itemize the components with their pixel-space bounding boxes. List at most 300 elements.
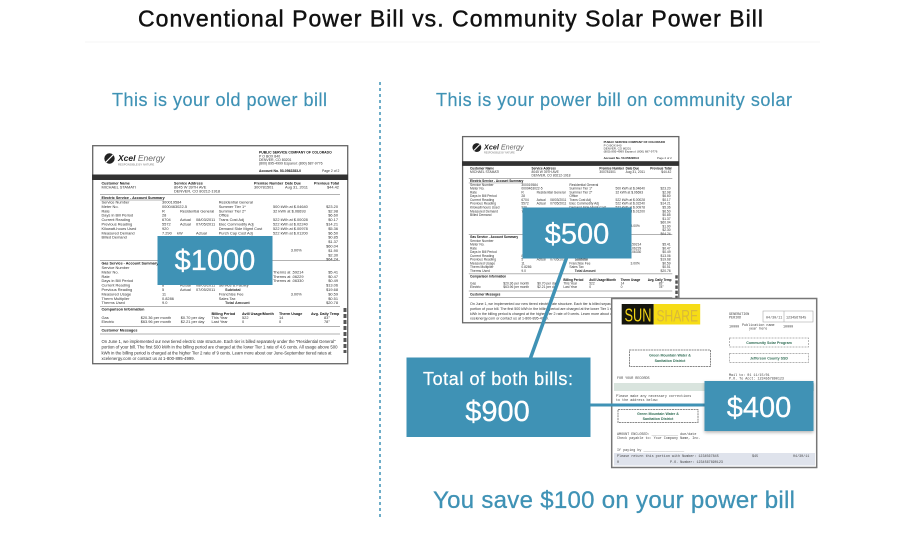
bill document: utility: $19.68	[661, 258, 671, 262]
bill document: Franchise Fee	[219, 291, 244, 296]
label: Green Mountain Water: Green Mountain Water &	[649, 354, 691, 358]
text: invoice header: 10000	[729, 326, 739, 330]
bill document: PUBLIC SERVICE COMPANY OF COLORADO	[259, 150, 332, 154]
bill document: utility: Rate	[470, 246, 477, 250]
bill document: utility: 6704	[521, 198, 529, 202]
bill document: Current Reading	[102, 217, 130, 222]
bill document: utility: 08/03/2011	[550, 198, 567, 202]
text: invoice header: PERIOD	[729, 316, 741, 320]
text: invoice header: GENERATION	[729, 313, 749, 317]
bill document: 08/03/2011	[196, 217, 215, 222]
label: Green Mountain Water remittance: Green Mountain Water &	[637, 412, 679, 416]
icon: Xcel logo	[104, 153, 166, 166]
bill document: Billed Demand	[102, 235, 127, 240]
bill document: Actual	[180, 222, 191, 226]
bill document: Rate	[102, 274, 110, 279]
bill document: utility: Premise Number	[599, 167, 625, 171]
bill document: R	[162, 208, 165, 213]
bill document: 300019584	[162, 200, 182, 204]
bill document: utility: Purch Cap Cost Adj	[569, 209, 598, 213]
bill document: utility: Rate	[470, 190, 477, 194]
bill document: $5.36	[328, 226, 338, 231]
bill document: Actual	[180, 217, 191, 222]
bill document: utility: 920	[521, 205, 527, 210]
callout: $400: $400	[727, 392, 791, 424]
bill document: 3.00%	[291, 291, 302, 296]
bill document: utility: Service Number	[470, 239, 495, 243]
bill document: utility: 07/05/2011	[550, 202, 567, 206]
bill document: SunShare: If paying by ____________________	[617, 448, 685, 453]
bill document: SunShare: AMOUNT ENCLOSED: _____________ due/date	[617, 432, 696, 437]
bill document: utility: Gas Service - Account Summary	[470, 235, 518, 239]
bill document: utility: Service Number	[470, 183, 495, 187]
bill document: $63.96 per month	[141, 319, 171, 324]
bill document: utility: Therms at .59214	[615, 243, 641, 247]
bill document: 8	[162, 283, 164, 288]
bill document: utility: $2.98	[662, 190, 671, 194]
bill document: utility: 78°	[659, 285, 664, 289]
icon: SunShare logo: SHARE	[656, 306, 698, 326]
bill document: Therms Used	[102, 300, 125, 305]
bill document: utility: Measured Demand	[470, 209, 498, 213]
bill document: $0.85	[328, 235, 338, 240]
label: Jefferson County SD	[730, 354, 808, 362]
bill document: utility	[462, 137, 679, 323]
bill document: Summer Tier 2*	[219, 208, 246, 213]
bill document: utility: $13.06	[661, 254, 671, 258]
text: invoice header: year here	[749, 326, 767, 332]
bill document: Therms at .06229	[273, 274, 304, 279]
bill document: Customer Messages	[102, 328, 137, 332]
bill document: utility: $20.78	[661, 269, 671, 273]
bill document: utility: DENVER, CO 80201	[604, 147, 631, 151]
bill document: utility: Actual	[550, 209, 560, 213]
bill document: 920	[162, 226, 169, 231]
bill document: 522	[242, 315, 248, 320]
bill document: utility: Elec Commodity Adj	[569, 202, 599, 206]
bill document: 0000463022-5	[162, 204, 187, 209]
bill document: utility: $1.37	[662, 217, 671, 221]
bill document: Page 2 of 2	[322, 169, 339, 173]
bill document: Comparison Information	[102, 308, 145, 312]
bill document: $19.68	[326, 287, 338, 292]
bill document: 07/05/2011	[196, 287, 215, 292]
bill document: 9.0	[162, 300, 168, 305]
bill document: Demand Side Mgmt Cost	[219, 226, 263, 231]
bill document: utility: Date Due	[626, 167, 639, 171]
bill document: utility: Actual	[537, 254, 546, 258]
bill document: Service Number	[102, 200, 130, 204]
bill document: utility: 9.0	[521, 269, 526, 273]
bill document: kWh in the billing period is charged at the higher Tier 2 rate of 9 cents. Learn more about our June-September tiered rates at	[102, 350, 332, 356]
bill document: Trans Cost Adj	[219, 217, 244, 222]
icon: Xcel logo	[472, 143, 524, 155]
bill document: 0.8286	[162, 296, 174, 301]
bill document: Electric Service - Account Summary	[102, 196, 166, 200]
bill document: Therms at .06330	[273, 278, 304, 283]
bill document: utility: Office	[569, 194, 578, 198]
bill document: utility: Current Reading	[470, 198, 494, 202]
bill document: utility: $2.30	[662, 228, 671, 232]
bill document: 78°	[324, 319, 330, 324]
bill document: SunShare: $45	[752, 454, 758, 459]
bill document: utility: 0	[621, 285, 623, 289]
bill document: Previous Reading	[102, 287, 132, 292]
bill document: Total Amount	[225, 300, 250, 305]
bill document: utility: 0.8286	[521, 265, 532, 269]
bill document: $13.06	[326, 283, 338, 288]
bill document: utility: $6.50	[662, 209, 671, 213]
bill document: utility: Meter No.	[470, 187, 485, 191]
bill document: utility: portion of your bill. The first 500 kWh in the billing period are charged at the lower Tier 1 rate of 4.6 cents. All usage above 500	[470, 307, 670, 311]
bill document: DENVER, CO 80201	[259, 158, 292, 162]
bill document: utility: Measured Usage	[470, 261, 495, 265]
bill document: SunShare: FOR YOUR RECORDS	[617, 377, 650, 381]
bill document: utility: Summer Tier 1*	[569, 187, 593, 191]
bill document: utility: 83°	[659, 282, 664, 286]
bill document: Service & Facility	[219, 283, 249, 288]
bill document: utility: Demand Side Mgmt Cost	[569, 205, 606, 210]
bill document: utility: Electric	[470, 285, 481, 289]
bill document: $20.78	[326, 300, 338, 305]
bill document: utility: Customer Name	[470, 167, 494, 171]
bill document: SunShare: P.O. To Acct: 1234567890123	[729, 378, 784, 382]
bill document: utility: 3.00%	[630, 224, 640, 228]
bill document: utility: Therms at .06229	[615, 246, 641, 250]
callout: $500	[522, 208, 632, 258]
bill document: utility: Trans Cost Adj	[569, 198, 591, 202]
callout: $1000	[158, 236, 272, 285]
bill document: Last Year	[212, 319, 228, 324]
bill document: utility: Billing Period	[563, 278, 583, 282]
callout: total of both bills: Total of both bills:	[423, 369, 573, 389]
bill document: 300781501	[254, 184, 273, 190]
heading: old power bill: This is your old power bill	[112, 90, 327, 110]
text: invoice header: 04/30/11	[766, 316, 782, 320]
bill document: SunShare: P.O. Number: 1234567890123	[670, 460, 723, 465]
bill document: Subtotal	[225, 287, 241, 292]
bill document: xcelenergy.com or contact us at 1-800-895-4999.	[102, 356, 195, 361]
text: invoice header: 1234567845	[786, 316, 806, 320]
bill document: SunShare: Please make any necessary corrections	[616, 394, 691, 399]
bill document: SunShare: to the address below:	[616, 398, 659, 403]
bill document: P O BOX 840	[259, 154, 280, 158]
bill document: 14	[279, 315, 284, 320]
bill document: utility: Days in Bill Period	[470, 250, 497, 254]
bill document: SunShare	[612, 298, 817, 468]
bill document: 6704	[162, 217, 171, 222]
bill document: Residential General	[219, 200, 253, 204]
bill document: Espanol: (800) 687-9776	[284, 162, 323, 166]
bill document: utility: 5	[521, 258, 523, 262]
label: Green Mountain Water remittance: Sanitation District	[643, 417, 674, 421]
bill document: $0.47	[328, 274, 338, 279]
bill document: $2.30	[328, 252, 339, 257]
bill document: utility: DENVER, CO 80212-1918	[532, 174, 571, 178]
bill document: Purch Cap Cost Adj	[219, 230, 253, 235]
bill document: 500 kWh at $.04640	[273, 204, 309, 209]
bill document: Therm Multiplier	[102, 296, 130, 301]
bill document: utility: R	[521, 190, 524, 194]
panel: conventional bill	[92, 146, 348, 364]
bill document: utility: (800) 895-4999	[604, 150, 624, 154]
bill document: Days in Bill Period	[102, 278, 133, 283]
bill document: utility: 0000463022-5	[521, 187, 543, 191]
bill document: utility: 8045 W 39TH AVE	[532, 170, 560, 174]
bill document: Electric	[102, 319, 114, 324]
bill document: utility: P O BOX 840	[604, 144, 622, 148]
bill document: utility: This Year	[563, 282, 578, 286]
bill document: kW	[177, 230, 183, 235]
panel: community solar bills	[406, 137, 817, 468]
bill document: $1.37	[328, 239, 338, 244]
bill document: utility: Meter No.	[470, 243, 485, 247]
callout: $400	[704, 381, 814, 431]
bill document: Premise Number	[254, 182, 284, 186]
conclusion: savings: You save $100 on your power bill	[433, 487, 795, 514]
bill document: utility: 522	[589, 282, 595, 286]
bill document: $1.90	[328, 248, 339, 253]
bill document: $0.70 per day	[181, 315, 205, 320]
callout: $500: $500	[545, 218, 609, 250]
bill document: utility: xcelenergy.com or contact us at 1-800-895-4999.	[470, 317, 549, 321]
bill document: Billing Period	[212, 312, 236, 316]
bill document: utility: $63.96 per month	[503, 285, 529, 289]
icon: Xcel logo: Xcel Energy	[117, 153, 166, 163]
bill document: utility: Account No. 53-0562283-0	[604, 156, 640, 160]
bill document: 28	[162, 213, 166, 218]
bill document: SunShare: 0	[617, 461, 619, 465]
bill document: 08/03/2011	[196, 283, 215, 288]
bill document: $2.98	[328, 208, 338, 213]
bill document: utility: Page 2 of 2	[657, 156, 672, 160]
bill document: utility: Service & Facility	[569, 254, 595, 258]
callout: $1000: $1000	[175, 245, 255, 277]
bill document: utility: $0.17	[662, 198, 671, 202]
bill document: Gas	[102, 315, 109, 320]
bill document: Service Address	[174, 182, 203, 186]
bill document: utility: 300019584	[521, 183, 538, 187]
bill document: $6.50	[328, 230, 339, 235]
bill document: $6.60	[328, 213, 339, 218]
bill document: utility: 500 kWh at $.04640	[615, 187, 645, 191]
icon: SunShare logo: SUN	[624, 306, 652, 326]
bill document: utility: On June 1, we implemented our new tiered electric rate structure. Each tier is billed separately under the "Residential General"	[470, 302, 669, 306]
bill document: utility: 300781501	[599, 170, 616, 174]
bill document: $44.42	[327, 184, 339, 190]
bill document: 07/05/2011	[196, 222, 215, 226]
bill document: utility: Previous Reading	[470, 258, 496, 262]
callout: total of both bills: $900	[465, 396, 530, 428]
bill document: utility: 28	[521, 194, 525, 198]
bill document: Kilowatt-hours Used	[102, 226, 136, 231]
bill document: utility: 522 kWh at $.00028	[615, 198, 645, 202]
bill document: utility: Aug 31, 2011	[626, 170, 645, 174]
bill document: utility: Franchise Fee	[569, 261, 591, 265]
bill document: Gas Service - Account Summary	[102, 262, 159, 266]
icon: SunShare logo	[622, 304, 700, 326]
bill document: Aug 31, 2011	[285, 184, 308, 190]
bill document: utility: $0.70 per day	[537, 282, 558, 286]
bill document: utility: Total Amount	[575, 269, 596, 273]
bill document: utility: 522 kWh at $.02240	[615, 202, 645, 206]
bill document: $0.59	[328, 291, 338, 296]
bill document: 522 kWh at $.01200	[273, 230, 309, 235]
bill document: utility: Comparison Information	[470, 274, 506, 278]
bill document: utility: $2.21 per day	[537, 285, 558, 289]
bill document: utility: 0	[589, 285, 591, 289]
bill document: SunShare: 04/30/11	[793, 454, 809, 459]
bill document: utility: $0.85	[662, 213, 671, 217]
bill document: utility: Days in Bill Period	[470, 194, 497, 198]
bill document: utility: $1.90	[662, 224, 671, 228]
bill document: Avill Usage/Month	[242, 312, 275, 316]
icon: Xcel logo: RESPONSIBLE BY NATURE	[484, 151, 515, 155]
bill document: utility: 3.00%	[630, 261, 640, 265]
bill document: utility: PUBLIC SERVICE COMPANY OF COLORADO	[604, 140, 666, 144]
bill document: utility: MICHAEL STAMATI	[470, 170, 499, 174]
bill document: Elec Commodity Adj	[219, 222, 254, 226]
heading: community solar bill: This is your power bill on community solar	[436, 90, 792, 110]
bill document: Previous Total	[314, 182, 339, 186]
label: Green Mountain Water remittance	[618, 410, 698, 422]
bill document: Actual	[180, 283, 191, 288]
bill document: Measured Usage	[102, 291, 131, 296]
label: Jefferson County SD: Jefferson County SSD	[750, 356, 788, 360]
bill document: utility: kWh in the billing period is charged at the higher Tier 2 rate of 9 cents. Learn more about our June-September tiered rates at	[470, 312, 665, 316]
bill document: $5.41	[328, 269, 338, 274]
bill document: utility: $6.60	[662, 194, 671, 198]
bill document: Account No. 53-0562283-0	[259, 169, 301, 173]
bill document: utility: Last Year	[563, 285, 578, 289]
bill document: $60.04	[326, 244, 339, 248]
text: invoice header: Publication name	[742, 323, 775, 328]
bill document: utility: $14.21	[661, 202, 671, 206]
bill document: utility: Actual	[537, 198, 546, 202]
bill document: 522 kWh at $.00978	[273, 226, 308, 231]
bill document: $23.20	[326, 204, 339, 209]
bill document: 3.00%	[291, 248, 302, 252]
bill document: 11	[162, 291, 166, 296]
bill document: This Year	[212, 315, 228, 320]
bill document: utility: Billed Demand	[470, 213, 492, 217]
bill document: Days in Bill Period	[102, 213, 133, 218]
bill document: Avg. Daily Temp	[311, 312, 340, 316]
bill document: SunShare: Mail to: 01 11/15/01	[729, 373, 770, 378]
bill document: utility: kW	[534, 209, 540, 213]
bill document: portion of your bill. The first 500 kWh in the billing period are charged at the lower Tier 1 rate of 4.6 cents. All usage above 500	[102, 344, 338, 350]
bill document: utility: $5.36	[662, 205, 671, 210]
bill document: Date Due	[285, 182, 301, 186]
bill document: 5	[162, 287, 164, 292]
bill document	[92, 146, 348, 364]
bill document: utility: Electric Service - Account Summary	[470, 179, 524, 183]
bill document: Previous Reading	[102, 222, 132, 226]
bill document: Meter No.	[102, 204, 119, 209]
bill document: utility: 522 kWh at $.00978	[615, 205, 645, 210]
bill document: utility: $44.42	[661, 170, 671, 174]
bill document: 0	[279, 319, 282, 324]
bill document: utility: Avg. Daily Temp	[648, 278, 672, 282]
connector: $400 to total	[590, 404, 705, 406]
callout: total of both bills	[406, 358, 590, 437]
bill document: utility: Customer Messages	[470, 292, 501, 296]
bill document: $20.36 per month	[141, 315, 171, 320]
bill document: $0.49	[328, 278, 338, 283]
bill document: utility: 5572	[521, 202, 529, 206]
bill document: utility: 522 kWh at $.01200	[615, 209, 645, 213]
bill document: utility: Previous Reading	[470, 202, 496, 206]
divider: dotted centre line	[379, 82, 381, 520]
bill document: Customer Name	[102, 182, 130, 186]
bill document: utility: Current Reading	[470, 254, 494, 258]
bill document: $0.51	[328, 296, 338, 301]
bill document: Rate	[102, 208, 110, 213]
bill document: (800) 895-4999	[259, 162, 283, 166]
label: Green Mountain Water	[630, 350, 710, 366]
bill document: utility: Gas	[470, 282, 476, 286]
bill document: utility: $64.24	[661, 232, 671, 236]
bill document: Residential General	[180, 208, 214, 213]
bill document: $64.24	[326, 257, 339, 262]
connector: $500 to total	[530, 258, 566, 358]
bill document: Therm Usage	[279, 312, 302, 316]
bill document: $0.17	[328, 217, 338, 222]
bill document: Meter No.	[102, 269, 119, 274]
bill document: utility: Service Address	[532, 167, 556, 171]
bill document: Actual	[180, 287, 191, 292]
text: invoice header	[729, 311, 813, 332]
bill document: Current Reading	[102, 283, 130, 288]
bill document: utility: Subtotal	[575, 258, 588, 262]
bill document: utility: $0.51	[662, 265, 671, 269]
bill document: utility: Therms Used	[470, 269, 490, 273]
bill document: 32 kWh at $.06693	[273, 208, 306, 213]
bill document: utility: Espanol: (800) 687-9776	[625, 150, 658, 154]
bill document: utility: $20.36 per month	[503, 282, 529, 286]
label: Green Mountain Water: Sanitation District	[655, 359, 686, 363]
bill document: utility: Actual	[537, 202, 546, 206]
icon: Xcel logo: RESPONSIBLE BY NATURE	[118, 162, 154, 166]
bill document: utility: Actual	[537, 258, 546, 262]
bill document: utility: Therms at .06330	[615, 250, 641, 254]
bill document: utility: 7.290	[521, 209, 530, 213]
bill document: 8045 W 39TH AVE	[174, 184, 207, 190]
bill document: Service Number	[102, 265, 130, 270]
bill document: utility: 11	[521, 261, 525, 265]
bill document: Sales Tax	[219, 296, 236, 301]
bill document: utility: $0.59	[662, 261, 671, 265]
bill document: 83°	[324, 315, 330, 320]
bill document: SunShare: Please return this portion with Number: 1234567845	[617, 454, 719, 459]
bill document: utility: $0.49	[662, 250, 671, 254]
bill document: 7.290	[162, 230, 173, 235]
label: Community Solar Program: Community Solar Program	[746, 341, 792, 345]
bill document: utility: Avill Usage/Month	[589, 278, 616, 282]
bill document: Summer Tier 1*	[219, 204, 246, 209]
bill document: On June 1, we implemented our new tiered electric rate structure. Each tier is billed separately under the "Residential General"	[102, 339, 336, 344]
bill document: utility: Residential General	[569, 183, 599, 187]
bill document: Therms at .59214	[273, 269, 304, 274]
bill document: utility: Previous Total	[650, 167, 672, 171]
bill document: utility: 8	[521, 254, 523, 258]
label: Community Solar Program	[730, 338, 808, 347]
bill document: MICHAEL STAMATI	[102, 184, 136, 190]
bill document: DENVER, CO 80212-1918	[174, 188, 220, 194]
bill document: $2.21 per day	[181, 319, 205, 324]
bill document: utility: Therm Multiplier	[470, 265, 495, 269]
bill document: Actual	[196, 230, 207, 235]
